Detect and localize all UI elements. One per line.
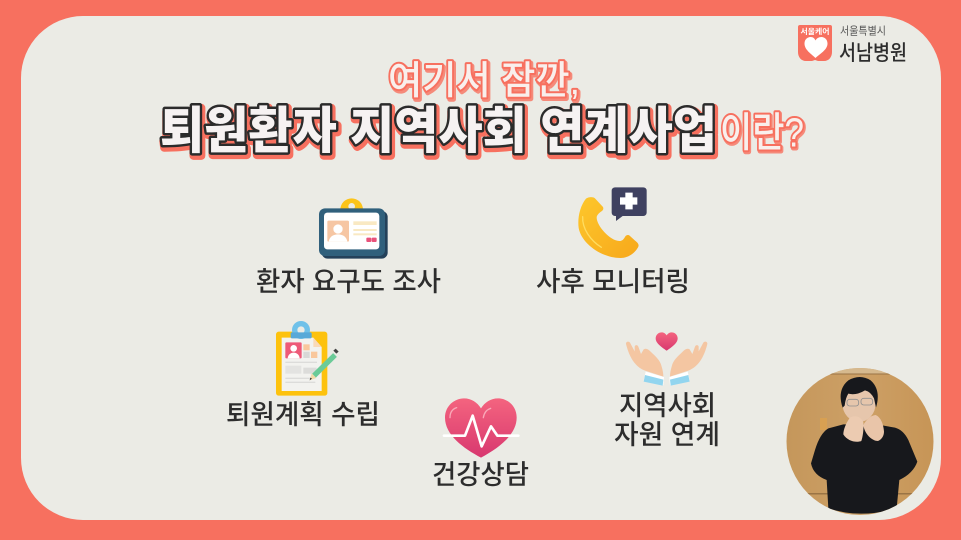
main title line: 퇴원환자 지역사회 연계사업 xyxy=(162,106,718,162)
sign language interpreter xyxy=(786,368,934,515)
icon: heart with pulse xyxy=(444,398,518,458)
logo badge: 서울케어 xyxy=(800,26,830,36)
logo hospital name: 서남병원 xyxy=(839,42,907,65)
label: health consultation: 건강상담 xyxy=(432,460,529,490)
title xyxy=(160,60,805,162)
title suffix: 이란? xyxy=(720,110,804,156)
icon: phone with medical bubble xyxy=(578,187,647,258)
label: discharge planning: 퇴원계획 수립 xyxy=(226,400,380,430)
icon: hands holding heart xyxy=(626,332,707,386)
logo small text: 서울특별시 xyxy=(840,24,886,38)
subtitle line: 여기서 잠깐, xyxy=(390,62,582,105)
label: community resource linkage: 지역사회 xyxy=(619,391,716,421)
label: community resource linkage: 자원 연계 xyxy=(614,420,720,450)
label: patient needs survey: 환자 요구도 조사 xyxy=(256,267,441,297)
label: post-discharge monitoring: 사후 모니터링 xyxy=(536,267,690,297)
icon: clipboard xyxy=(276,321,339,396)
icon: ID card xyxy=(319,198,388,259)
title suffix: 이란? xyxy=(721,111,805,157)
main title line: 퇴원환자 지역사회 연계사업 xyxy=(160,103,717,159)
logo: Seoul Seonam Hospital xyxy=(798,24,907,65)
subtitle line: 여기서 잠깐, xyxy=(388,60,580,103)
label: community resource linkage xyxy=(614,391,720,450)
main title line: 퇴원환자 지역사회 연계사업 xyxy=(160,103,717,159)
